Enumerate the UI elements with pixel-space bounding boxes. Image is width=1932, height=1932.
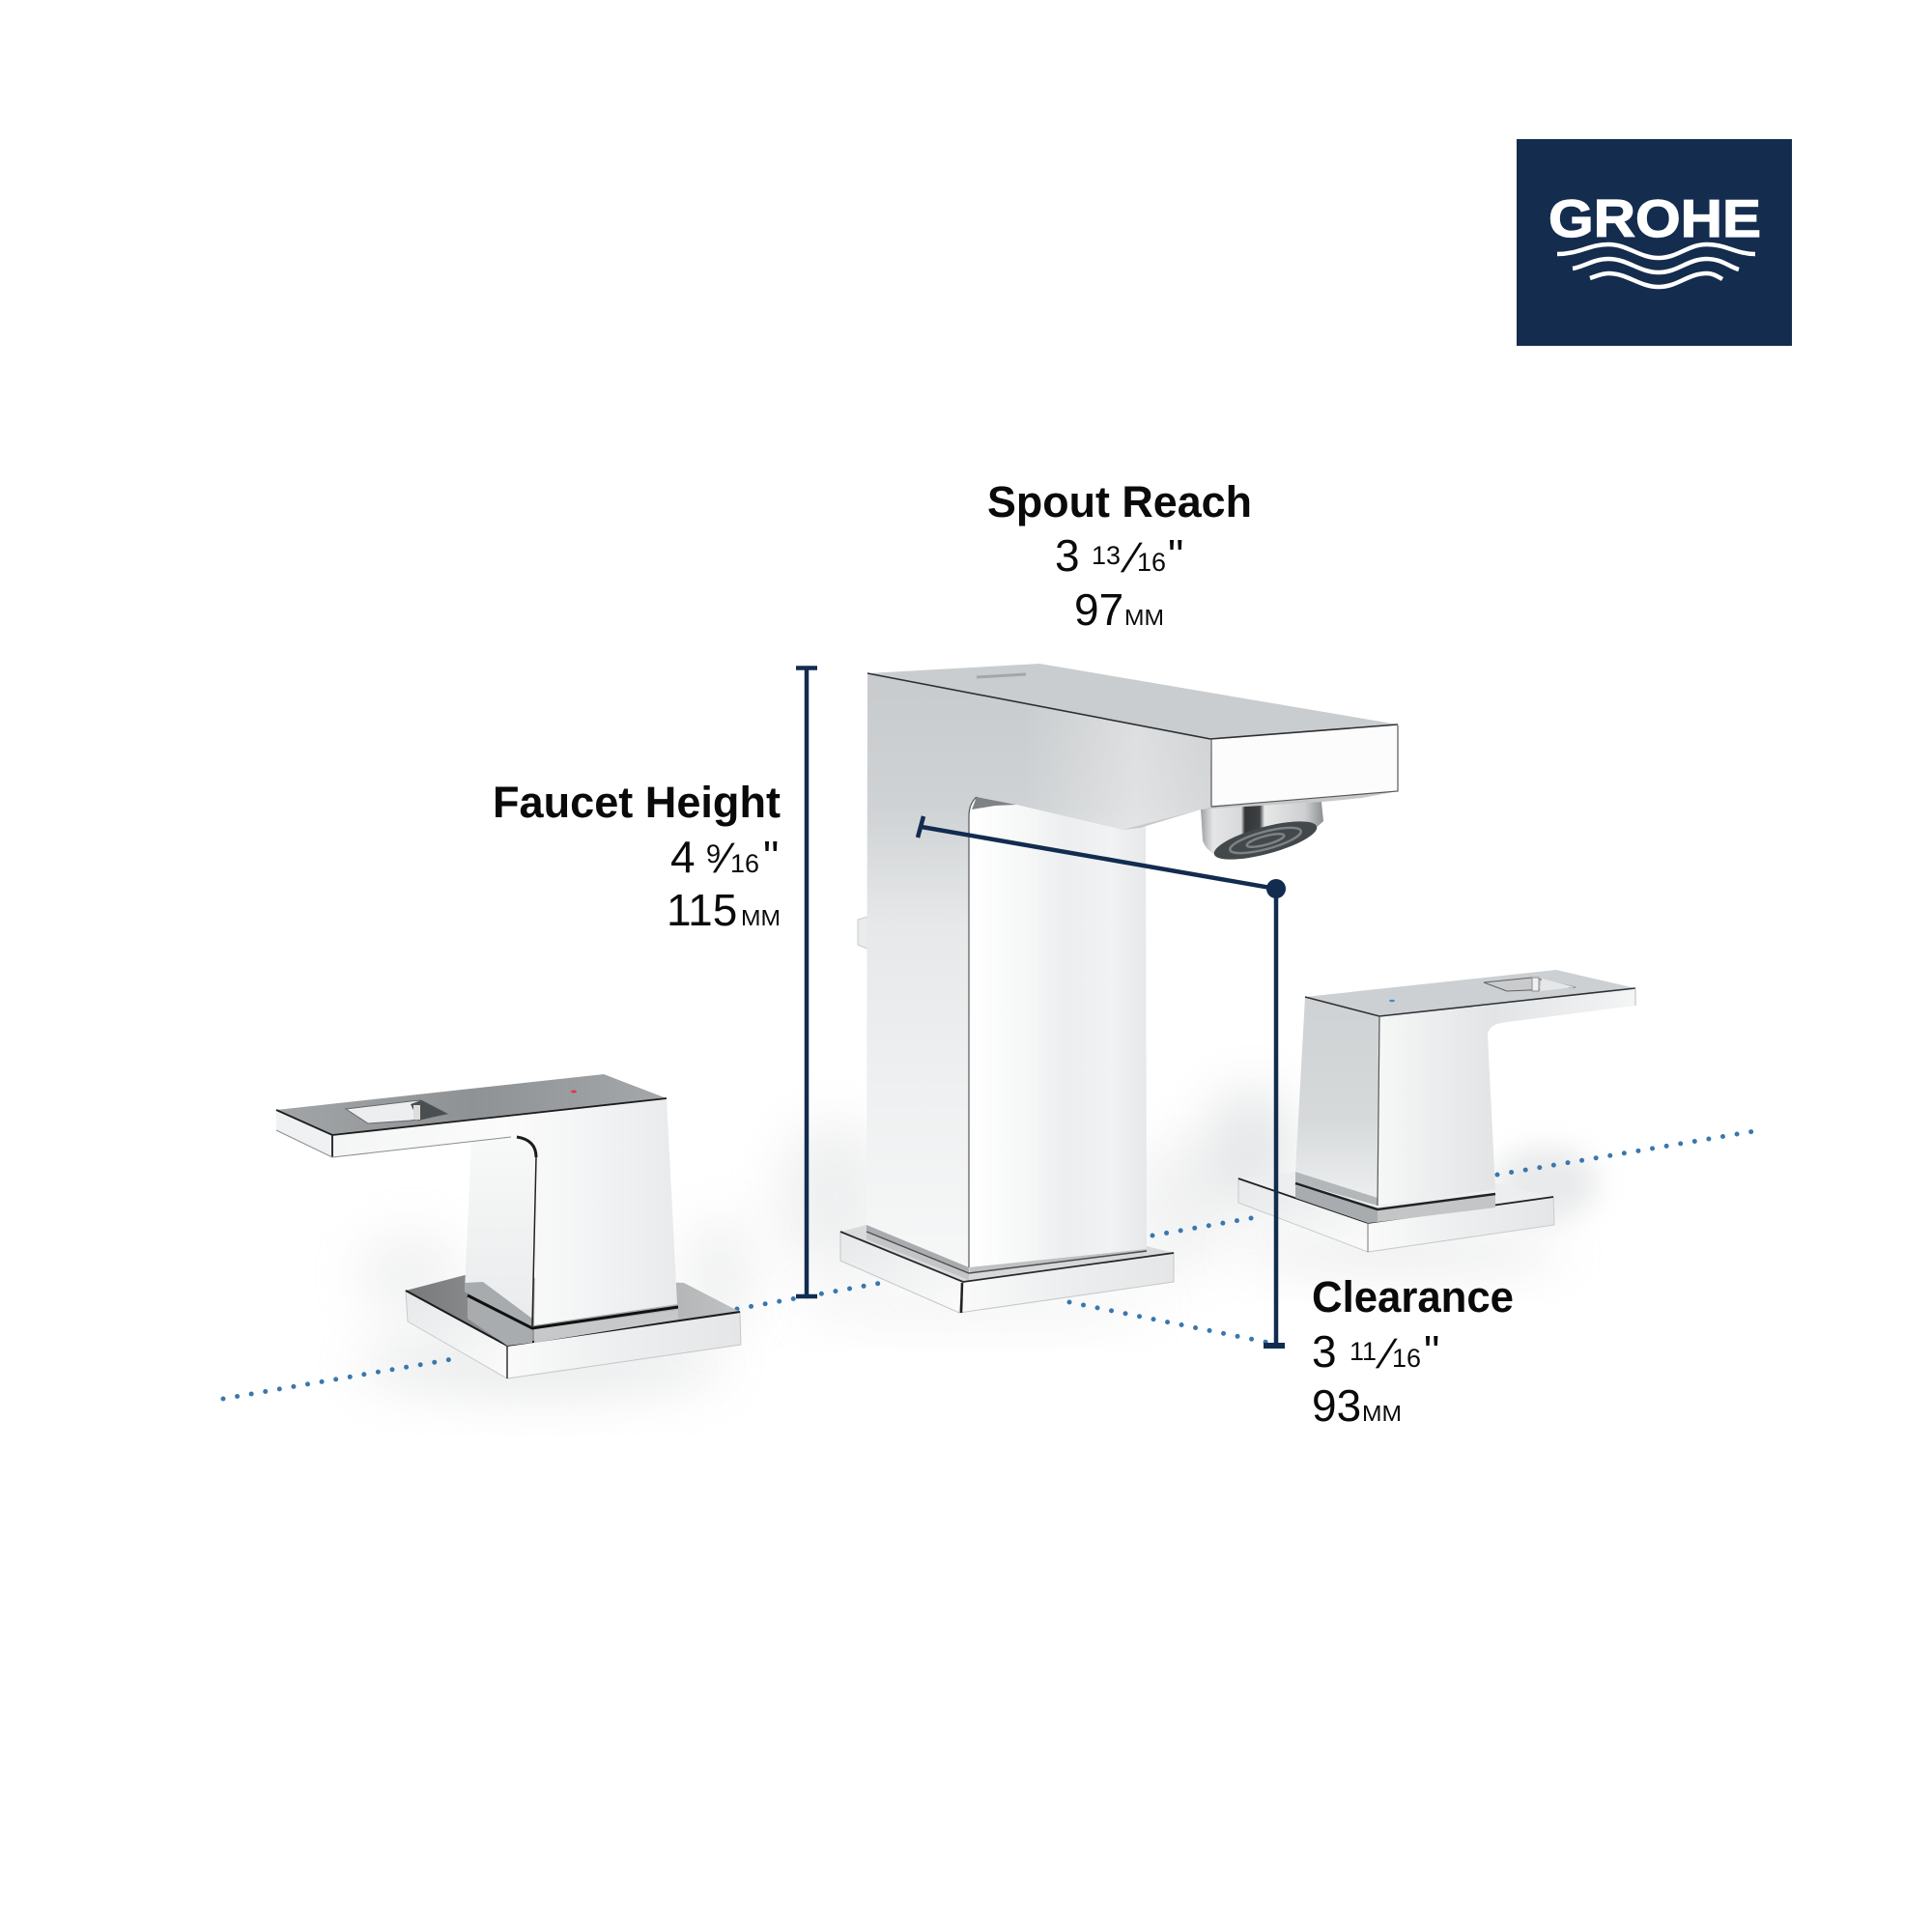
- center faucet spout: [840, 664, 1398, 1313]
- lever opening: [1484, 978, 1576, 991]
- spout underside: [1122, 791, 1398, 830]
- handle body side bottom reflection: [465, 1282, 532, 1326]
- dimension lines: [796, 668, 1286, 1346]
- lever top plate: [1305, 970, 1635, 1016]
- label: faucet height: 115: [667, 885, 737, 935]
- lever top plate: [276, 1074, 667, 1135]
- label: faucet height: /: [709, 837, 738, 882]
- label: faucet height: 4: [670, 832, 696, 882]
- handle body side: [465, 1133, 536, 1326]
- label: spout reach: /: [1117, 536, 1146, 582]
- top of spout: [867, 664, 1398, 739]
- label: clearance: Clearance: [1312, 1272, 1514, 1321]
- label: faucet height: 16: [730, 849, 759, 878]
- body base strip: [867, 1225, 969, 1272]
- lever left side: [276, 1110, 332, 1157]
- spout notch reflection: [972, 797, 1016, 810]
- handle base: [406, 1275, 741, 1378]
- side bottom reflection: [1295, 1172, 1378, 1206]
- cold indicator: [1389, 1000, 1395, 1002]
- label: faucet height: Faucet Height: [493, 778, 781, 827]
- label: clearance: MM: [1362, 1401, 1402, 1426]
- handle body front: [332, 1098, 677, 1325]
- rear lift rod: [858, 917, 867, 949]
- base plate: [840, 1225, 1174, 1313]
- label: spout reach: 3: [1055, 530, 1080, 581]
- label: clearance: ": [1424, 1326, 1439, 1377]
- handle base: [1238, 1172, 1554, 1252]
- label: faucet height: 9: [706, 839, 721, 868]
- label: spout reach: 13: [1092, 541, 1121, 570]
- hot indicator: [571, 1090, 577, 1094]
- front of body: [969, 805, 1147, 1267]
- label: spout reach: 97: [1074, 584, 1123, 635]
- handle body side: [1295, 997, 1379, 1206]
- left side of body: [867, 673, 1211, 1267]
- label: spout reach: 16: [1137, 548, 1166, 577]
- label: clearance: [1312, 1272, 1514, 1431]
- logo waves: [1557, 244, 1755, 287]
- edge lines: [867, 673, 1398, 739]
- label: spout reach: Spout Reach: [987, 477, 1252, 526]
- aerator: [1201, 802, 1323, 867]
- label: faucet height: MM: [741, 905, 781, 930]
- label: clearance: 16: [1392, 1344, 1421, 1373]
- collar shadow line: [468, 1295, 678, 1328]
- label: clearance: /: [1372, 1332, 1401, 1378]
- collar shadow line: [1295, 1183, 1495, 1209]
- spout reach and clearance line: [918, 816, 1286, 1346]
- spout tip face: [1211, 725, 1398, 807]
- handle edges: [276, 1098, 667, 1157]
- label: clearance: 11: [1350, 1337, 1377, 1366]
- dotted sink line: [223, 1131, 1754, 1399]
- handle body front: [1378, 988, 1635, 1206]
- spout side highlight: [1024, 702, 1211, 830]
- label: clearance: 3: [1312, 1326, 1337, 1377]
- faucet height line: [796, 668, 817, 1296]
- GROHE logo: [1517, 139, 1792, 346]
- label: spout reach: MM: [1124, 605, 1164, 630]
- label: spout reach: [987, 477, 1252, 635]
- handle edges: [1305, 988, 1635, 1016]
- label: faucet height: [493, 778, 781, 935]
- label: spout reach: ": [1168, 530, 1183, 581]
- label: faucet height: ": [763, 832, 779, 882]
- floor shadows: [357, 1087, 1599, 1397]
- label: clearance: 93: [1312, 1380, 1361, 1431]
- lever opening: [346, 1100, 447, 1123]
- left hot handle: [276, 1074, 741, 1378]
- engraved logo: [977, 674, 1026, 677]
- right cold handle: [1238, 970, 1635, 1252]
- GROHE logo: GROHE: [1548, 188, 1761, 248]
